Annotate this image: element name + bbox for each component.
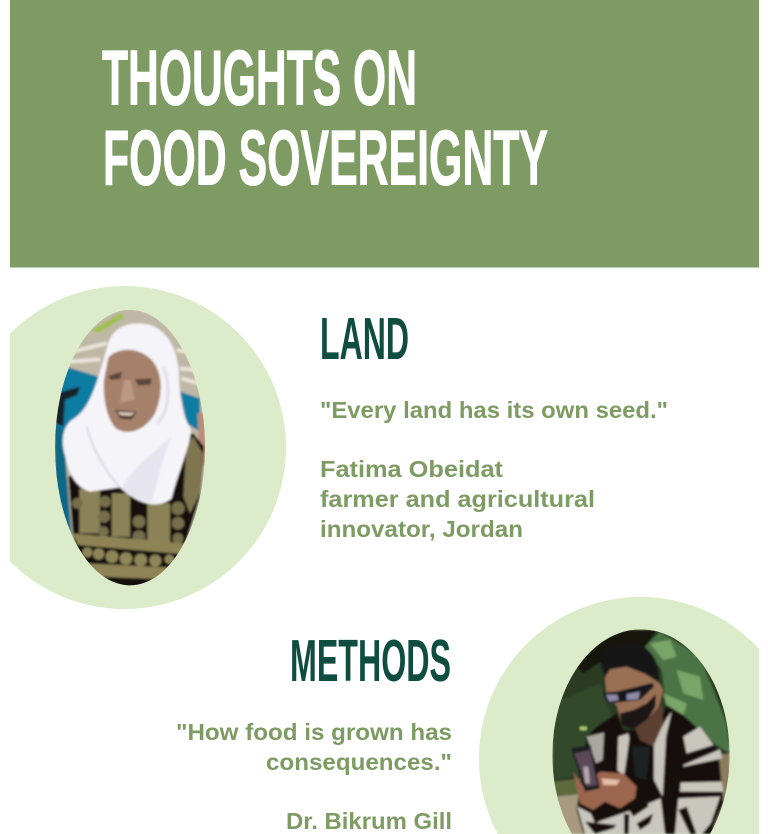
neck and head [633, 705, 663, 747]
title: THOUGHTS ON [102, 34, 417, 122]
embroidered dress [68, 433, 204, 590]
panel: land [10, 286, 668, 609]
heading: methods: METHODS [290, 628, 451, 694]
quote: land: "Every land has its own seed." [320, 397, 668, 423]
black body [577, 705, 723, 834]
header banner [10, 0, 759, 268]
panel: methods [176, 597, 759, 834]
quote: methods: "How food is grown has [176, 719, 452, 745]
hands and phone [573, 772, 637, 810]
face [104, 350, 161, 432]
portrait: Dr. Bikrum Gill [552, 629, 730, 834]
attribution: Dr. Bikrum Gill: Dr. Bikrum Gill [286, 808, 452, 834]
title [102, 34, 548, 202]
quote: methods: consequences." [266, 749, 452, 775]
background circle: methods [479, 597, 759, 834]
striped sweater [617, 733, 629, 777]
heading: land: LAND [320, 306, 409, 372]
attribution: Fatima Obeidat: Fatima Obeidat [320, 456, 503, 482]
white scarf [63, 323, 191, 504]
attribution: Fatima Obeidat: farmer and agricultural [320, 486, 595, 512]
quote: methods [176, 719, 452, 775]
stone path background [55, 310, 204, 542]
attribution: Fatima Obeidat [320, 456, 595, 542]
attribution: Fatima Obeidat: innovator, Jordan [320, 516, 523, 542]
forest background [552, 629, 730, 834]
portrait: Fatima Obeidat [53, 308, 207, 590]
background circle: land [10, 286, 286, 609]
